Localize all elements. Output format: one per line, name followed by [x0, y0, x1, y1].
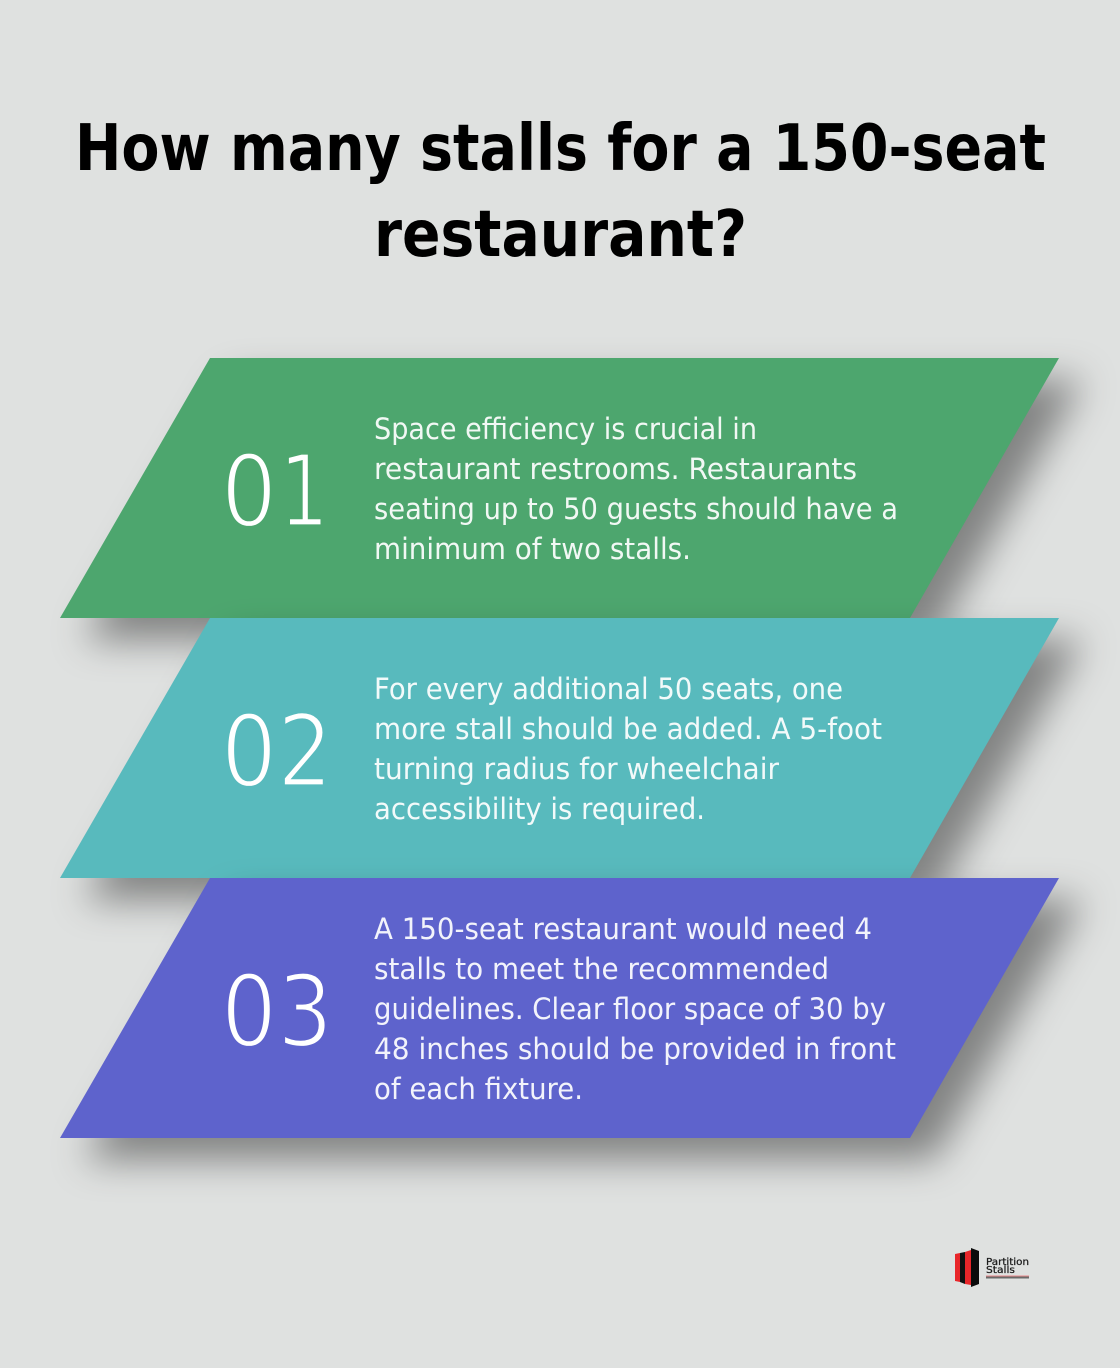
step 02 text: more stall should be added. A 5-foot [374, 712, 882, 746]
step number 02: 02 [221, 693, 333, 810]
icon: partition stall panels [955, 1248, 979, 1287]
step 02 text: accessibility is required. [374, 792, 705, 826]
step 03 text: of each fixture. [374, 1072, 583, 1106]
step 03 text [374, 912, 896, 1106]
panel: step 02 [60, 618, 1083, 900]
step number 01: 1 [279, 433, 329, 550]
step 01 text: minimum of two stalls. [374, 532, 691, 566]
logo: Partition Stalls [955, 1248, 1029, 1287]
logo wordmark: Partition [986, 1257, 1029, 1268]
step 03 text: guidelines. Clear floor space of 30 by [374, 992, 886, 1026]
panel: step 03 [60, 878, 1083, 1160]
step 01 text [374, 412, 898, 566]
logo wordmark: Stalls [986, 1265, 1015, 1276]
logo wordmark [986, 1257, 1029, 1278]
step number 03: 03 [221, 953, 333, 1070]
step 03 text: 48 inches should be provided in front [374, 1032, 896, 1066]
step 01 text: seating up to 50 guests should have a [374, 492, 898, 526]
step 02 text [374, 672, 882, 826]
panel: step 01 [60, 358, 1083, 640]
step number 01: 0 [221, 433, 277, 550]
step 02 text: turning radius for wheelchair [374, 752, 779, 786]
step 01 text: restaurant restrooms. Restaurants [374, 452, 857, 486]
step 02 text: For every additional 50 seats, one [374, 672, 843, 706]
step 03 text: stalls to meet the recommended [374, 952, 829, 986]
title: restaurant? [374, 198, 747, 272]
title [75, 112, 1046, 272]
step 01 text: Space efficiency is crucial in [374, 412, 757, 446]
step 03 text: A 150-seat restaurant would need 4 [374, 912, 872, 946]
